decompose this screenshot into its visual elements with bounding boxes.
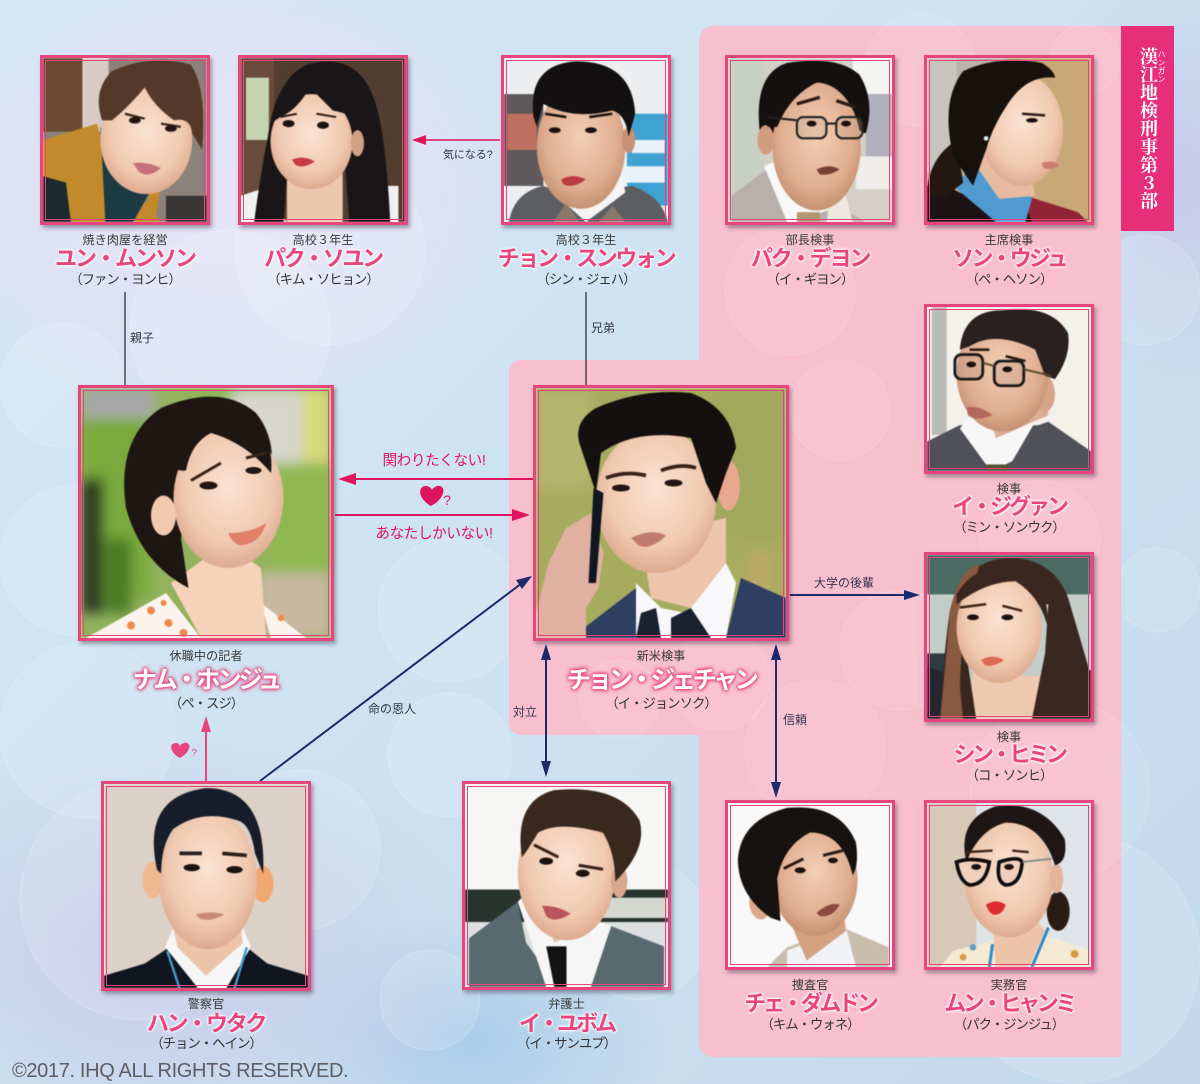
line: 親子 (124, 292, 126, 385)
card: ユン・ムンソン (40, 55, 214, 287)
label: 大学の後輩: 大学の後輩 (814, 576, 874, 590)
label: 対立: 対立 (513, 705, 537, 719)
name: ナム・ホンジュ (133, 667, 279, 694)
card: ハン・ウタク (100, 781, 316, 1051)
role: 部長検事 (786, 233, 834, 247)
name: シン・ヒミン (953, 742, 1064, 767)
actor: （シン・ジェハ） (536, 272, 636, 287)
label: heart question mark: ? (443, 492, 451, 508)
role: 検事 (997, 482, 1021, 496)
name: ハン・ウタク (147, 1011, 265, 1036)
actor: （パク・ジンジュ） (954, 1017, 1064, 1032)
arrow: 信頼 (771, 644, 781, 798)
actor: （イ・ジョンソク） (605, 696, 717, 711)
portrait (924, 304, 1094, 474)
arrow: 警察官 to 記者 (201, 716, 211, 781)
label: 命の恩人: 命の恩人 (368, 702, 416, 716)
name: イ・ユボム (519, 1011, 614, 1036)
title: 漢江地検刑事第3部 (1121, 26, 1174, 231)
role: 警察官 (188, 997, 224, 1011)
label: 関わりたくない: 関わりたくない! (382, 453, 486, 469)
card: ソン・ウジュ (924, 55, 1098, 287)
actor: （ペ・ヘソン） (966, 272, 1052, 287)
name: パク・ソユン (264, 246, 382, 271)
portrait (462, 781, 671, 990)
icon: heart small (171, 743, 189, 758)
card: チョン・スンウォン (498, 55, 677, 287)
actor: （ファン・ヨンヒ） (69, 272, 181, 287)
name: チョン・ジェチャン (567, 667, 755, 694)
arrow: 対立 (541, 644, 551, 777)
card: ナム・ホンジュ (78, 385, 338, 711)
label: 気になる: 気になる? (443, 149, 493, 161)
card: ムン・ヒャンミ (924, 800, 1098, 1032)
arrow: 関わりたくない (338, 473, 533, 485)
label: 兄弟: 兄弟 (591, 321, 615, 335)
actor: （チョン・ヘイン） (150, 1036, 262, 1051)
label: 信頼: 信頼 (783, 713, 807, 727)
portrait (40, 55, 210, 225)
card: チョン・ジェチャン (532, 385, 794, 711)
portrait (924, 800, 1094, 970)
portrait (924, 55, 1094, 225)
role: 捜査官 (792, 978, 828, 992)
arrow: 気になる (412, 135, 500, 145)
name: チェ・ダムドン (744, 991, 876, 1016)
role: 休職中の記者 (169, 649, 243, 663)
role: 検事 (997, 730, 1021, 744)
name: チョン・スンウォン (498, 246, 674, 271)
name: ムン・ヒャンミ (944, 991, 1074, 1016)
actor: （コ・ソンヒ） (966, 768, 1052, 783)
role: 主席検事 (985, 233, 1033, 247)
title: 漢江地検刑事第3部: 漢江地検刑事第３部 (1138, 47, 1158, 210)
name: ソン・ウジュ (952, 246, 1066, 271)
portrait (78, 385, 334, 641)
portrait (725, 800, 895, 970)
label: small heart question mark: ? (191, 748, 197, 759)
arrow: あなたしかいない (335, 509, 530, 521)
copyright: ©2017. IHQ ALL RIGHTS RESERVED. (12, 1060, 348, 1082)
title: 漢江地検刑事第3部: ハンガン (1157, 50, 1166, 83)
card: シン・ヒミン (924, 552, 1098, 783)
role: 弁護士 (548, 997, 585, 1011)
portrait (101, 781, 311, 991)
card: パク・ソユン (238, 55, 412, 287)
role: 焼き肉屋を経営 (82, 233, 168, 247)
actor: （イ・ギヨン） (767, 272, 853, 287)
actor: （キム・ウォネ） (760, 1017, 860, 1032)
portrait (533, 385, 789, 641)
card: チェ・ダムドン (724, 800, 900, 1032)
portrait (501, 55, 671, 225)
actor: （イ・サンユプ） (517, 1036, 616, 1051)
actor: （キム・ソヒョン） (267, 272, 379, 287)
card: パク・デヨン (724, 55, 900, 287)
role: 高校３年生 (556, 233, 616, 247)
name: パク・デヨン (751, 246, 869, 271)
arrow: 命の恩人 (260, 576, 532, 781)
name: イ・ジグァン (952, 494, 1066, 519)
role: 実務官 (991, 978, 1027, 992)
actor: （ペ・スジ） (169, 696, 243, 711)
icon: heart (420, 486, 443, 506)
name: ユン・ムンソン (55, 246, 195, 271)
actor: （ミン・ソンウク） (953, 520, 1065, 535)
role: 高校３年生 (293, 233, 353, 247)
label: あなたしかいない: あなたしかいない! (375, 526, 493, 542)
card: イ・ユボム (462, 781, 676, 1051)
label: 親子: 親子 (130, 331, 154, 345)
card: イ・ジグァン (924, 304, 1098, 535)
portrait (725, 55, 895, 225)
line: 兄弟 (585, 292, 587, 385)
portrait (924, 552, 1094, 722)
role: 新米検事 (637, 649, 685, 663)
portrait (238, 55, 408, 225)
arrow: 大学の後輩 (790, 590, 920, 600)
